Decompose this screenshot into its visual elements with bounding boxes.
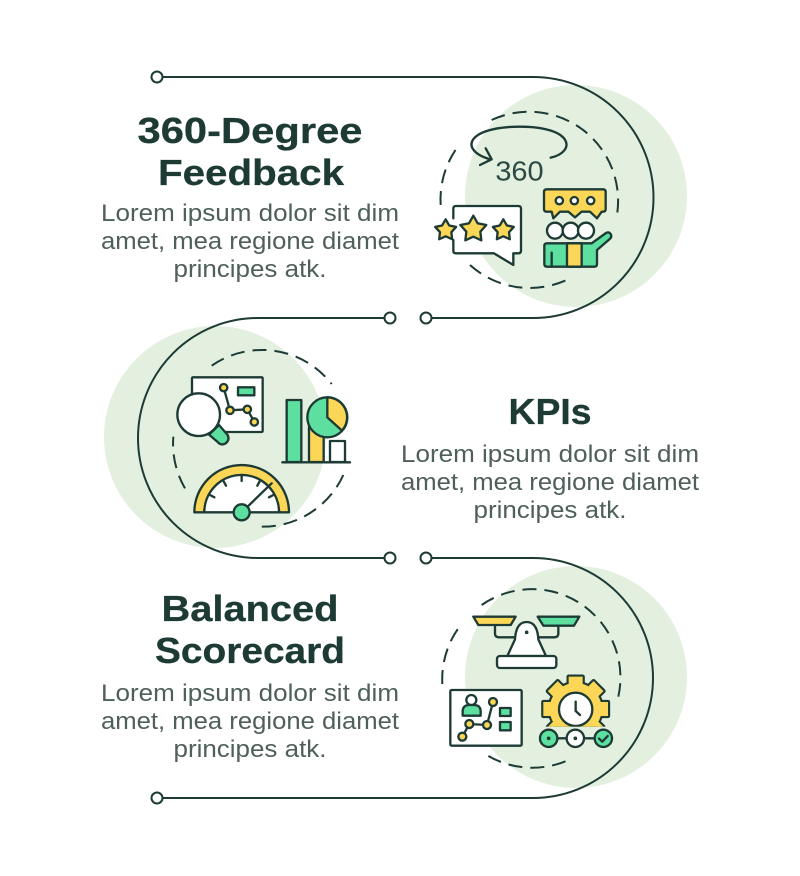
icon: magnified chart	[177, 377, 263, 444]
icon: balanced scorecard	[442, 589, 620, 768]
panel: balanced scorecard	[101, 552, 687, 804]
text block	[101, 680, 399, 763]
text block	[401, 441, 699, 524]
icon: gear with clock	[543, 677, 608, 737]
panel: KPIs	[104, 312, 699, 564]
text block: principes atk.	[474, 497, 626, 524]
icon: strategy board	[450, 690, 522, 746]
label: 360: 360	[495, 155, 544, 186]
icon: team with chat	[544, 189, 611, 267]
heading: Scorecard	[155, 630, 345, 671]
connector line	[152, 72, 654, 324]
connector line	[138, 312, 396, 564]
panel: 360-degree feedback	[101, 72, 687, 324]
text block: principes atk.	[174, 736, 326, 763]
green background circle	[465, 566, 687, 788]
heading	[155, 588, 345, 671]
text block: Lorem ipsum dolor sit dim	[101, 680, 399, 707]
text block: Lorem ipsum dolor sit dim	[101, 200, 399, 227]
icon: KPI analytics	[173, 350, 350, 527]
text block	[101, 200, 399, 283]
heading	[138, 110, 362, 193]
text block: Lorem ipsum dolor sit dim	[401, 441, 699, 468]
green background circle	[465, 85, 687, 307]
heading: Feedback	[158, 152, 345, 193]
icon: bar and pie chart	[282, 397, 350, 462]
icon: process flow	[540, 702, 612, 747]
connector line	[152, 552, 653, 804]
green background circle	[104, 326, 326, 548]
heading: 360-Degree	[138, 110, 362, 151]
heading: KPIs	[508, 391, 592, 432]
icon: rotation arrow	[471, 127, 566, 165]
text block: amet, mea regione diamet	[401, 469, 699, 496]
text block: amet, mea regione diamet	[101, 228, 399, 255]
text block: principes atk.	[174, 256, 326, 283]
heading: Balanced	[162, 588, 338, 629]
text block: amet, mea regione diamet	[101, 708, 399, 735]
icon: speedometer	[194, 465, 289, 520]
icon: 360 feedback	[435, 112, 618, 288]
icon: rating speech bubble	[435, 206, 521, 265]
icon: scales	[473, 617, 579, 668]
